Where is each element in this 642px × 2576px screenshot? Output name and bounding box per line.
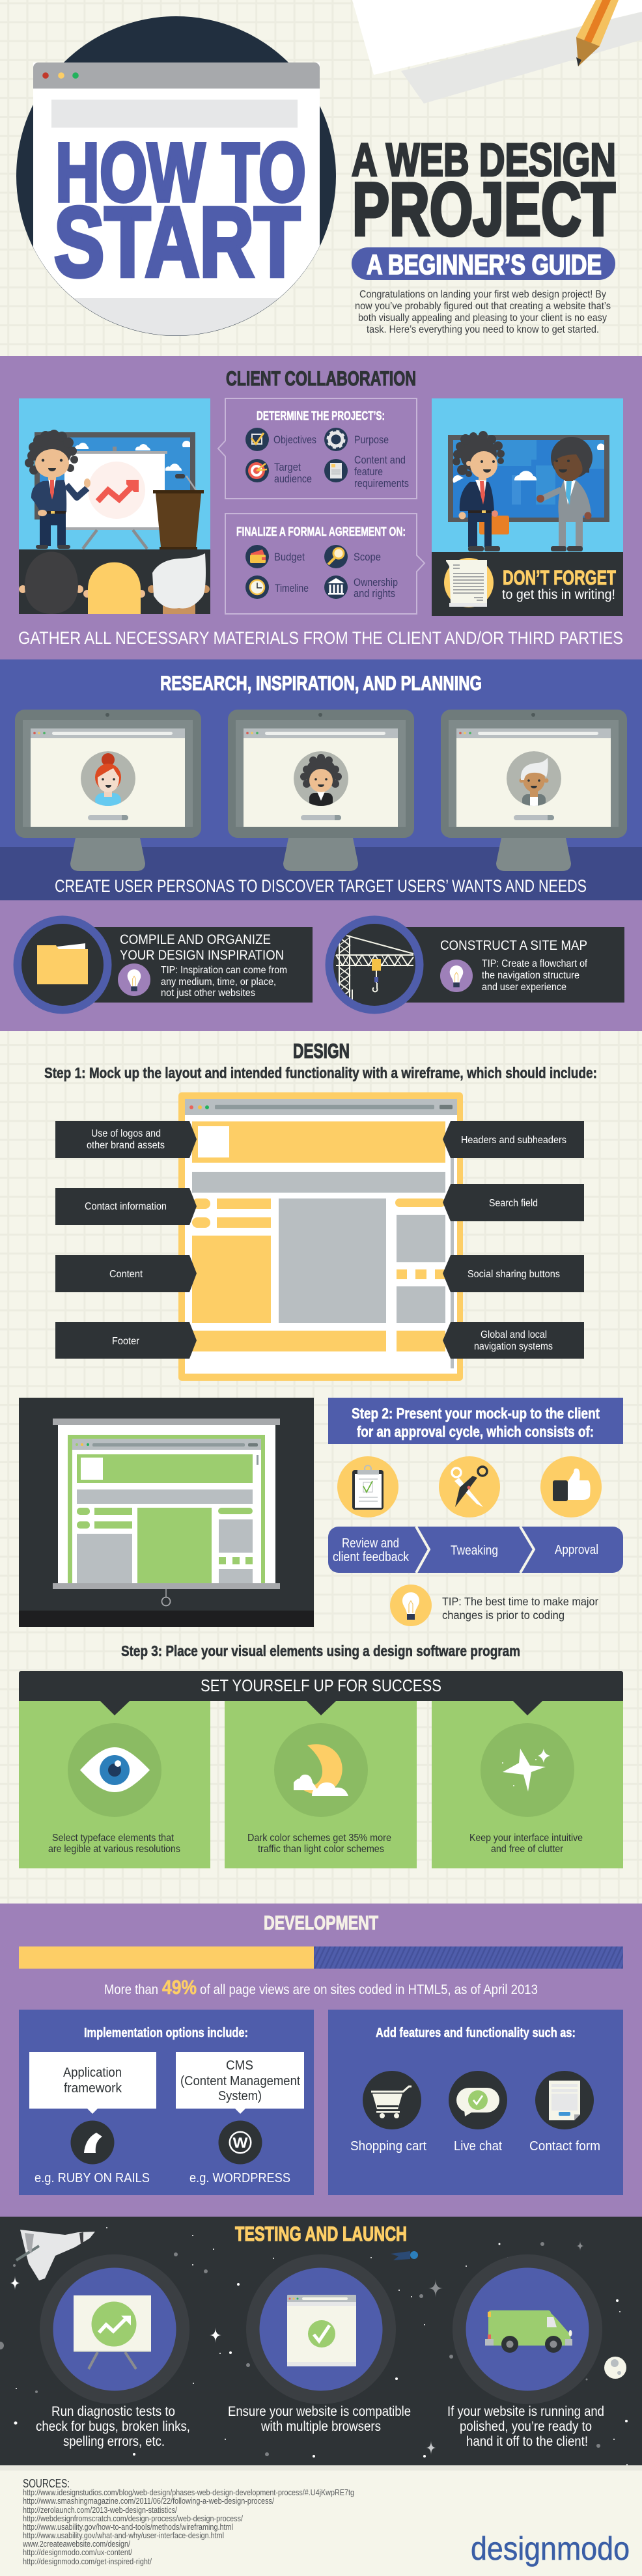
panel: client collaboration [0, 356, 642, 659]
panel: implementation options: e.g. RUBY ON RAILS [35, 2171, 150, 2185]
card: dark color schemes: Dark color schemes get 35% more [247, 1833, 391, 1844]
man in grey suit [537, 437, 593, 551]
subheading: FINALIZE A FORMAL AGREEMENT ON: [236, 525, 406, 539]
card: compile and organize: any medium, time, or place, [161, 976, 276, 988]
card: construct a site map: and user experience [482, 982, 566, 993]
labels: Purpose [354, 434, 389, 446]
labels: audience [274, 473, 312, 485]
panel: features: Contact form [529, 2139, 600, 2154]
icon: rails [70, 2121, 115, 2164]
card: intuitive interface: and free of clutter [491, 1844, 564, 1855]
chart on board [88, 462, 145, 519]
step: diagnostics: Run diagnostic tests to [51, 2403, 175, 2419]
callout: navigation: navigation systems [474, 1341, 553, 1352]
paper sheet and shadow [352, 0, 642, 104]
icon: comet [391, 2251, 418, 2260]
labels: Ownership [354, 577, 398, 589]
card: dark color schemes [225, 1701, 417, 1868]
callout: headers [443, 1121, 584, 1158]
card: compile and organize [13, 915, 313, 1014]
step: launch: hand it off to the client! [466, 2433, 588, 2449]
card: intuitive interface: Keep your interface intuitive [469, 1833, 583, 1844]
box: application framework [29, 2052, 156, 2114]
icon: browser check [287, 2295, 356, 2366]
sources list: http://www.usability.gov/how-to-and-tools/methods/wireframing.html [23, 2523, 233, 2532]
icon: shopping cart [363, 2071, 421, 2129]
title: a web design project [352, 135, 616, 251]
icon: scissors [439, 1456, 500, 1517]
icon: pencil [576, 0, 619, 66]
intro text [355, 289, 611, 335]
header: hero section [16, 0, 642, 337]
title: how to start: HOW TO [55, 126, 306, 219]
callout: logos: other brand assets [87, 1140, 165, 1151]
icon: target [245, 459, 269, 482]
step: launch [447, 2254, 604, 2449]
monitor: curly haired persona [228, 710, 414, 871]
sources list [22, 2488, 354, 2566]
process chevrons: Review and [342, 1536, 399, 1551]
tip [390, 1585, 598, 1626]
banner: set yourself up for success: SET YOURSELF UP FOR SUCCESS [201, 1676, 441, 1695]
icon: budget [245, 545, 269, 568]
callout: contact information: Contact information [85, 1201, 167, 1212]
callout: navigation: Global and local [481, 1329, 547, 1340]
step: launch: If your website is running and [447, 2403, 604, 2419]
monitor: white haired persona [441, 710, 627, 871]
heading: CLIENT COLLABORATION [226, 367, 416, 390]
icon: chart on board [74, 2295, 151, 2369]
banner: set yourself up for success [19, 1671, 623, 1715]
panel: development [0, 1904, 642, 2217]
sources heading: SOURCES: [23, 2477, 70, 2490]
labels: Objectives [273, 434, 316, 446]
icon: contact form [535, 2071, 594, 2129]
sources list: http://designmodo.com/ux-content/ [23, 2548, 132, 2557]
labels [274, 551, 398, 600]
browser window [33, 62, 320, 336]
icon: delivery van [485, 2310, 572, 2353]
callout: don't forget: to get this in writing! [502, 587, 615, 602]
tip: TIP: The best time to make major [442, 1595, 598, 1608]
man with briefcase [453, 431, 509, 551]
labels: Scope [354, 551, 381, 563]
presenter [25, 430, 91, 549]
subheading: DETERMINE THE PROJECT’S: [257, 409, 385, 423]
icon: wordpress: W [233, 2135, 248, 2151]
callout: search: Search field [489, 1198, 538, 1209]
icon: content [324, 459, 348, 482]
icon: crane [335, 935, 414, 1000]
panel: research, inspiration and planning [0, 659, 642, 900]
card: construct a site map: the navigation structure [482, 970, 579, 981]
panel: features: Add features and functionality such as: [376, 2025, 576, 2040]
panel: features [328, 2010, 623, 2195]
icon: objectives [245, 428, 269, 451]
step 2 heading [328, 1398, 623, 1444]
icon: moon and clouds [294, 1744, 348, 1796]
sources list: http://www.smashingmagazine.com/2011/06/22/following-a-web-design-process/ [23, 2497, 274, 2506]
section: step 3 [19, 1642, 623, 1868]
labels: requirements [354, 478, 409, 490]
callout: content [55, 1255, 197, 1292]
panel: handshake scene [432, 398, 623, 616]
title: how to start: START [54, 187, 300, 298]
step: browsers: Ensure your website is compatible [228, 2403, 411, 2419]
statistic: of all page views are on sites coded in HTML5, as of April 2013 [200, 1982, 538, 1997]
panel: step 2 approval cycle [328, 1398, 623, 1626]
callout: navigation [443, 1322, 584, 1359]
sources list: http://zerolaunch.com/2013-web-design-statistics/ [23, 2506, 177, 2515]
box: application framework: Application [63, 2066, 122, 2080]
step: diagnostics: check for bugs, broken links, [36, 2418, 190, 2434]
callout: headers: Headers and subheaders [461, 1135, 566, 1146]
panel: implementation options: Implementation options include: [84, 2025, 248, 2040]
panel: inspiration and site map [0, 900, 642, 1031]
panel: features: Live chat [454, 2139, 502, 2154]
callout: social: Social sharing buttons [468, 1269, 560, 1280]
labels [273, 434, 409, 490]
icon: bulb [440, 960, 473, 992]
card: compile and organize: not just other websites [161, 988, 255, 999]
card: legible typefaces: are legible at various resolutions [48, 1844, 180, 1855]
icon: thumbs up [540, 1456, 602, 1517]
panel: determine the project's [218, 398, 417, 499]
panel: testing and launch [0, 2217, 642, 2465]
title: how to start [54, 126, 306, 298]
callout: search [443, 1184, 584, 1221]
heading: RESEARCH, INSPIRATION, AND PLANNING [160, 671, 482, 695]
icon: purpose [324, 428, 348, 451]
box: cms: CMS [226, 2058, 253, 2073]
heading: TESTING AND LAUNCH [235, 2222, 407, 2245]
callout: footer: Footer [112, 1336, 139, 1347]
card: intuitive interface [432, 1701, 623, 1868]
card: construct a site map: CONSTRUCT A SITE MAP [440, 938, 587, 953]
navy circle behind browser [16, 16, 336, 336]
box: cms: System) [218, 2089, 262, 2103]
audience [19, 549, 210, 614]
labels: Budget [274, 551, 305, 563]
star field [0, 2227, 628, 2465]
step: diagnostics [36, 2254, 190, 2449]
process chevrons: Tweaking [451, 1544, 498, 1558]
card: construct a site map [326, 915, 624, 1014]
icon: moon [604, 2357, 626, 2379]
card: compile and organize: COMPILE AND ORGANIZE [120, 932, 271, 947]
callout: footer [55, 1322, 197, 1359]
icon: sparkle [502, 1749, 550, 1792]
panel: implementation options [19, 2010, 314, 2195]
sources list: www.2createawebsite.com/design/ [22, 2540, 130, 2549]
callout: social [443, 1255, 584, 1292]
sources list: http://designmodo.com/get-inspired-right/ [23, 2557, 152, 2566]
progress bar [19, 1946, 623, 1969]
box: application framework: framework [64, 2081, 122, 2096]
card: compile and organize: TIP: Inspiration can come from [161, 965, 287, 976]
step: launch: polished, you’re ready to [460, 2418, 592, 2434]
sources list: http://webdesignfromscratch.com/design-process/web-design-process/ [23, 2514, 243, 2523]
sources list: http://www.usability.gov/what-and-why/user-interface-design.html [23, 2531, 224, 2540]
box: cms [176, 2052, 304, 2114]
labels: and rights [354, 588, 395, 600]
labels: Content and [354, 454, 406, 466]
icon: space shuttle [16, 2230, 95, 2280]
statistic [104, 1976, 538, 1999]
process chevrons: Approval [555, 1543, 598, 1557]
step: browsers [228, 2254, 411, 2434]
icon: timeline [245, 575, 269, 599]
panel: presenter scene [19, 398, 210, 614]
icon: folder [37, 943, 88, 984]
card: construct a site map: TIP: Create a flowchart of [482, 958, 588, 969]
intro text: Congratulations on landing your first web design project! By [359, 289, 606, 300]
step: diagnostics: spelling errors, etc. [63, 2433, 165, 2449]
icon: eye [80, 1747, 150, 1792]
icon: live chat [449, 2071, 507, 2129]
callout: content: Content [109, 1269, 143, 1280]
process chevrons [328, 1527, 623, 1573]
heading: DESIGN [293, 1039, 350, 1062]
sources list: http://www.idesignstudios.com/blog/web-design/phases-web-design-development-process/#.U4jKwpRE7tg [23, 2488, 354, 2497]
statistic: 49% [162, 1976, 197, 1999]
intro text: now you’ve probably figured out that creating a website that’s [355, 301, 611, 312]
panel: implementation options: e.g. WORDPRESS [189, 2171, 290, 2185]
labels: feature [354, 466, 383, 478]
card: compile and organize: YOUR DESIGN INSPIRATION [120, 948, 284, 963]
icon: scope [324, 545, 348, 568]
icon: clipboard [337, 1456, 398, 1517]
card: dark color schemes: traffic than light color schemes [258, 1844, 384, 1855]
callout: contact information [55, 1188, 197, 1225]
podium and mic [153, 474, 204, 549]
icon: ownership [324, 575, 348, 599]
intro text: both visually appealing and pleasing to your client is no easy [358, 312, 607, 324]
process chevrons: client feedback [333, 1550, 410, 1564]
section: design step 1 [44, 1039, 597, 1381]
labels: Target [274, 462, 301, 473]
labels: Timeline [275, 583, 309, 594]
panel: projector mock-up [19, 1398, 314, 1627]
box: cms: (Content Management [180, 2074, 300, 2088]
callout: logos: Use of logos and [91, 1128, 161, 1139]
intro text: task. Here’s everything you need to know to get started. [367, 324, 599, 335]
callout: don't forget [432, 552, 623, 616]
step 3 heading: Step 3: Place your visual elements using a design software program [121, 1642, 520, 1659]
heading: DEVELOPMENT [264, 1912, 378, 1934]
tip: changes is prior to coding [442, 1609, 565, 1622]
footer: sources and logo [0, 2465, 642, 2576]
card: legible typefaces [19, 1701, 210, 1868]
step: browsers: with multiple browsers [260, 2418, 381, 2434]
panel: finalize agreement [225, 514, 425, 614]
icon: wordpress [219, 2121, 262, 2164]
icon: bulb [118, 963, 150, 996]
monitor: red haired persona [15, 710, 201, 871]
callout: logos [55, 1121, 197, 1158]
statistic: More than [104, 1982, 158, 1997]
panel: features: Shopping cart [350, 2139, 426, 2154]
wireframe illustration [178, 1092, 463, 1381]
card: legible typefaces: Select typeface elements that [52, 1833, 174, 1844]
